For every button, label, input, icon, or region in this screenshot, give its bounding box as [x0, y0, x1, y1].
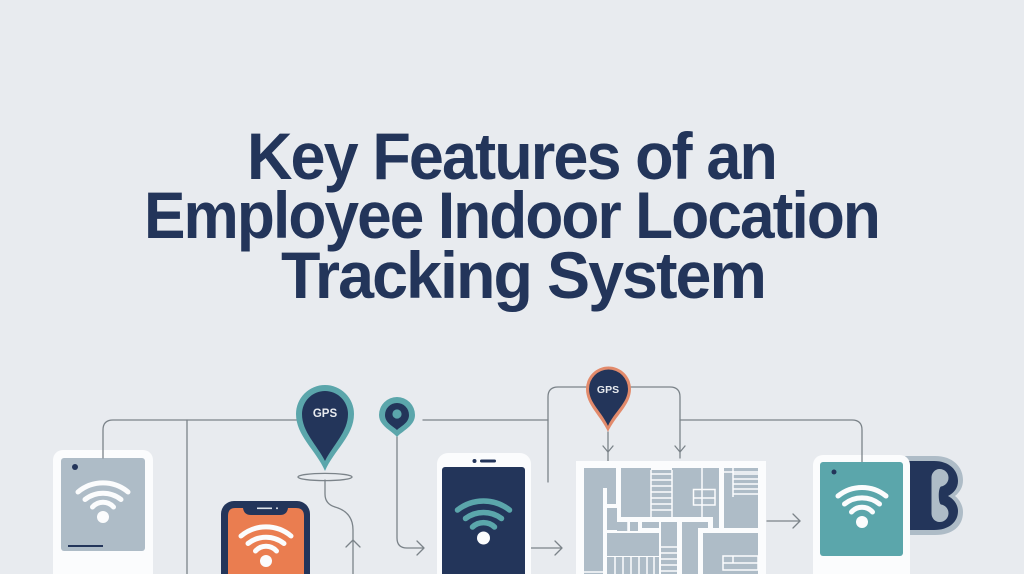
- connector: grey tag to GPS pin: [103, 420, 300, 458]
- device: orange smartphone: [221, 501, 310, 574]
- title: Tracking System: [281, 238, 765, 312]
- title: Key Features of an: [247, 119, 776, 193]
- connector lines: [187, 387, 862, 574]
- connector: line into teal tag: [861, 455, 863, 462]
- icon: wifi on teal tag: [838, 487, 886, 528]
- icon: wifi on grey tag: [78, 483, 128, 523]
- icon: large GPS pin: [296, 385, 354, 481]
- icon: small location pin: [379, 397, 415, 437]
- icon: B-shaped badge: [905, 456, 963, 535]
- floor plan: [576, 461, 766, 574]
- floor plan inner walls: [584, 468, 758, 574]
- device: grey wifi tag: [53, 450, 153, 574]
- floor plan rooms: [584, 468, 758, 574]
- icon: wifi on navy phone: [458, 501, 510, 544]
- device: navy smartphone: [437, 453, 531, 574]
- title: Employee Indoor Location: [144, 178, 879, 252]
- device: teal wifi tag: [813, 455, 910, 574]
- icon: large GPS pin: GPS: [313, 408, 337, 420]
- icon: GPS pin with orange outline: GPS: [597, 384, 619, 396]
- icon: wifi on orange phone: [241, 527, 291, 567]
- icon: GPS pin with orange outline: [586, 366, 631, 432]
- title: [144, 119, 879, 312]
